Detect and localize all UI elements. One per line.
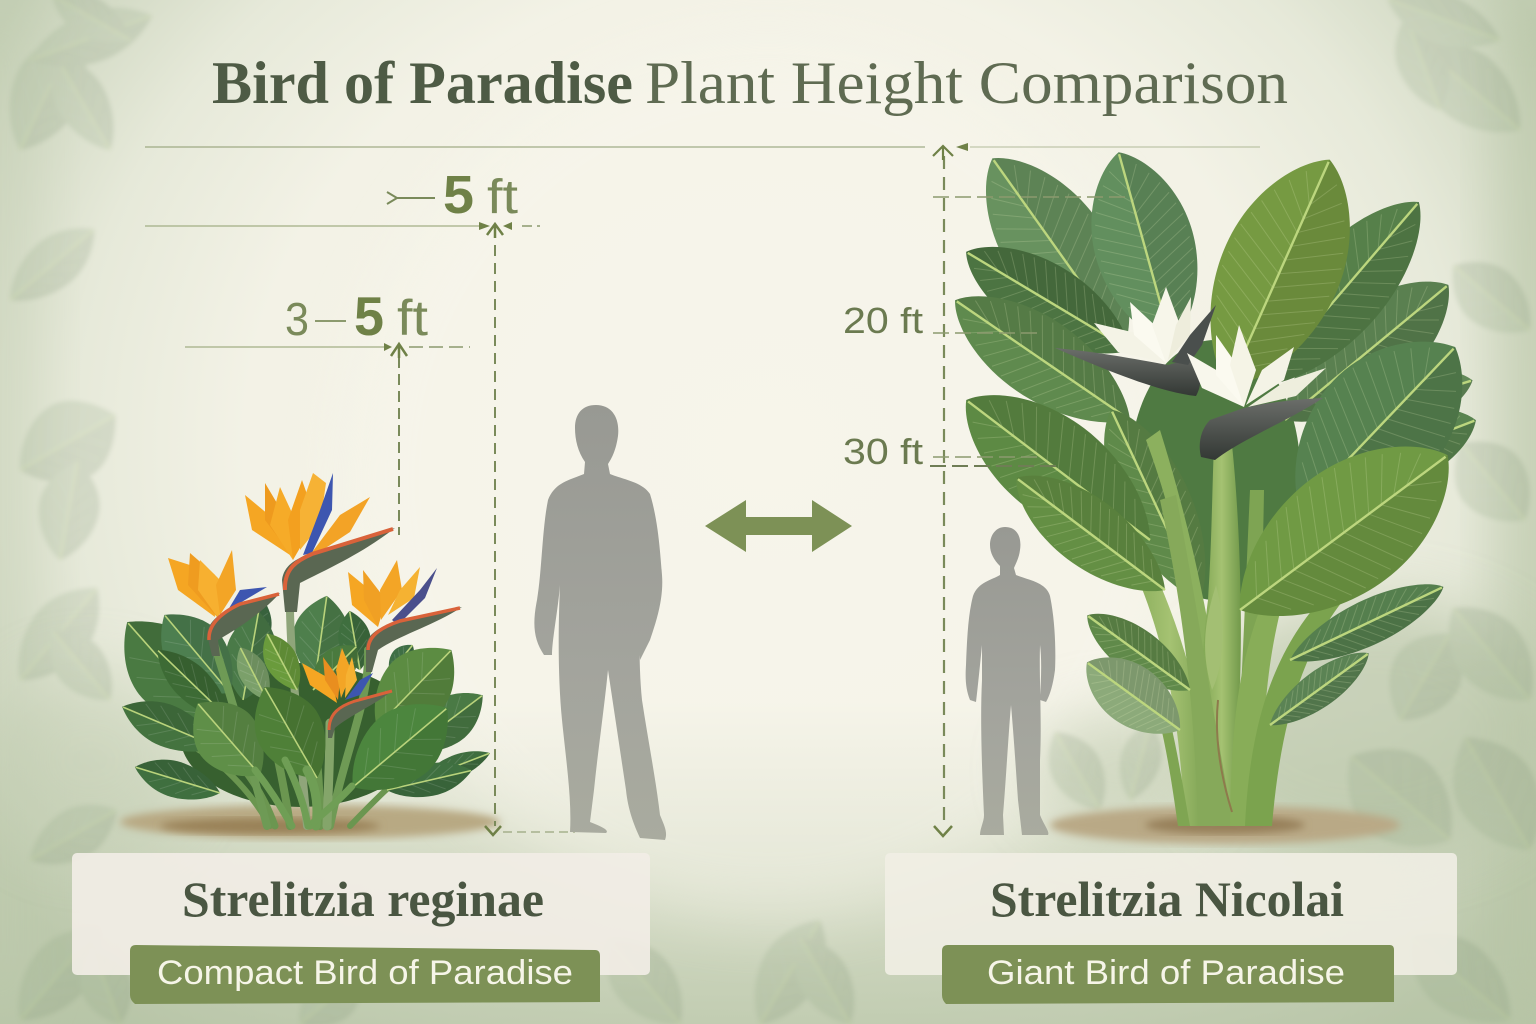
- silhouette: adult beside compact plant: [534, 405, 666, 840]
- height measure: 3-5 ft: [185, 285, 470, 535]
- flower stalks: [213, 577, 368, 826]
- silhouette: adult beside giant plant: [966, 527, 1055, 835]
- label: 20 ft: 20 ft: [843, 300, 923, 341]
- plant: Strelitzia nicolai: [932, 129, 1502, 826]
- height measure: 5 ft: ft: [487, 171, 518, 224]
- title: [212, 50, 1288, 116]
- species name: Strelitzia Nicolai: [990, 871, 1344, 927]
- height measure: 3-5 ft: ft: [397, 290, 428, 346]
- label bar: Compact Bird of Paradise: Compact Bird of Paradise: [157, 954, 573, 992]
- plant: Strelitzia reginae: [98, 473, 497, 826]
- flower: top orange: [245, 473, 395, 612]
- flower: right orange: [348, 560, 462, 672]
- panel: Strelitzia nicolai: [885, 853, 1457, 975]
- trunk stems: [1120, 430, 1350, 826]
- height measure: 5 ft: 5: [443, 165, 474, 225]
- height measure: 3-5 ft: 5: [354, 285, 384, 347]
- stems: [190, 740, 410, 826]
- flower: left orange: [168, 550, 280, 656]
- height measure: 3-5 ft: 3: [285, 293, 309, 345]
- height measure: 5 ft: [145, 165, 575, 835]
- title: Bird of Paradise: [212, 50, 633, 116]
- foliage mass: [1130, 340, 1300, 600]
- label bar: Giant Bird of Paradise: [942, 945, 1394, 1004]
- ground: compact plant: [120, 805, 500, 839]
- label: 30 ft: 30 ft: [843, 431, 923, 472]
- flower: low orange: [302, 648, 393, 738]
- upper leaves: [932, 129, 1502, 615]
- dark foliage mass: [180, 663, 420, 807]
- lower leaves: [937, 361, 1453, 754]
- species name: Strelitzia reginae: [182, 871, 544, 927]
- label bar: Compact Bird of Paradise: [130, 945, 600, 1004]
- height measure: giant plant axis: [843, 143, 1125, 836]
- ground: giant plant: [1050, 806, 1400, 844]
- label bar: Giant Bird of Paradise: Giant Bird of Paradise: [987, 954, 1345, 992]
- back leaves: [98, 592, 497, 810]
- front bright leaf: [1203, 405, 1485, 660]
- front leaves: [173, 626, 470, 815]
- panel: Strelitzia reginae: [72, 853, 650, 975]
- front stalks: [255, 760, 352, 826]
- flower: white right: [1187, 325, 1326, 460]
- flower: white left: [1055, 287, 1216, 396]
- top reference line: [145, 146, 1260, 148]
- double-headed arrow: [705, 500, 852, 552]
- title: Plant Height Comparison: [645, 50, 1288, 116]
